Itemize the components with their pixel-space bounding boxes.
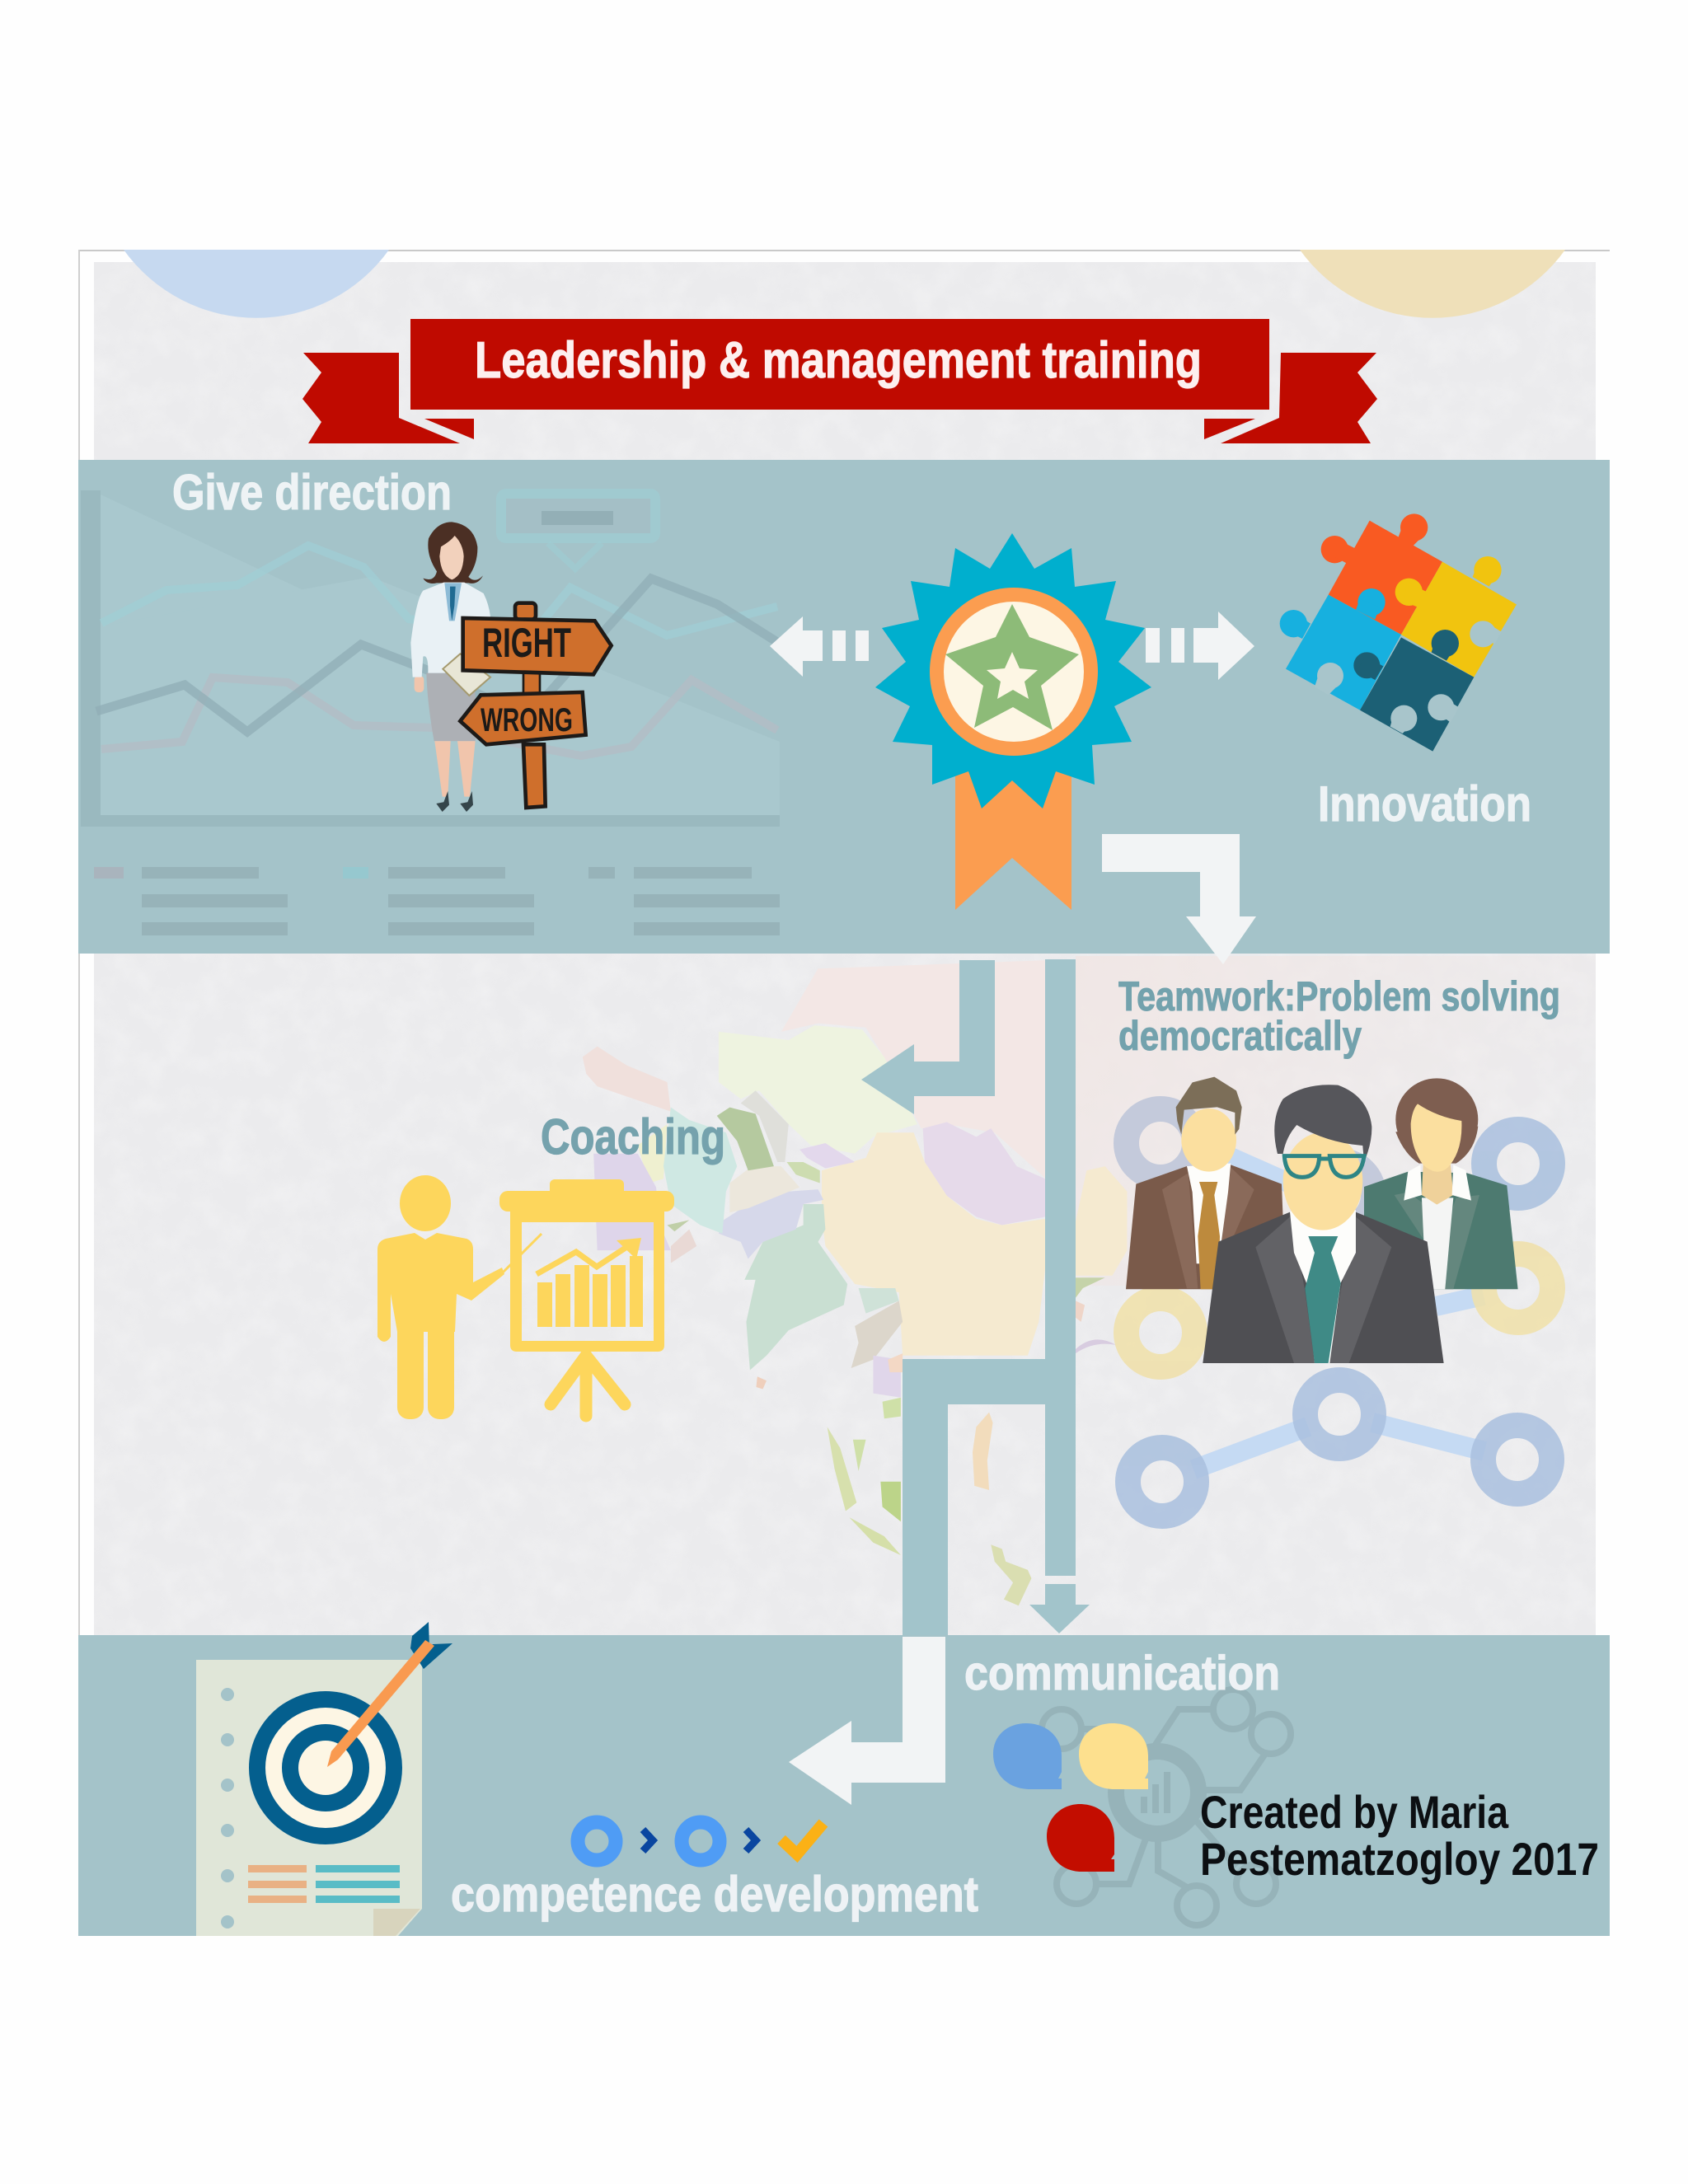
arrow in target <box>327 1622 452 1767</box>
icon: target on paper <box>196 1622 452 1936</box>
arrow: white elbow to competence <box>789 1637 945 1805</box>
heading: teamwork <box>1118 973 1560 1059</box>
banner left tail <box>302 353 460 443</box>
target <box>249 1691 402 1844</box>
title banner <box>302 319 1377 443</box>
person: back right woman <box>1364 1078 1518 1289</box>
paper background <box>78 250 1610 1638</box>
heading: innovation: Innovation <box>1318 776 1531 832</box>
arrow: dashed left <box>770 616 869 677</box>
icon: progress steps <box>578 1822 823 1860</box>
heading: give direction: Give direction <box>172 465 452 520</box>
icon: presenter at board <box>377 1175 674 1419</box>
banner right fold <box>1204 419 1255 439</box>
sunburst <box>875 533 1151 808</box>
icon: rosette award <box>875 533 1151 910</box>
orange ring <box>930 588 1098 756</box>
presentation board <box>499 1179 674 1416</box>
decorative circle: blue <box>124 250 389 318</box>
green star <box>945 604 1079 730</box>
ribbon <box>955 758 1071 910</box>
list bars <box>248 1865 400 1903</box>
panel: top teal band <box>78 460 1610 954</box>
person: front man <box>1203 1085 1444 1363</box>
heading: competence development: competence development <box>451 1867 978 1922</box>
decorative circle: yellow <box>1300 250 1565 318</box>
arrow: white elbow to teamwork <box>1102 834 1256 964</box>
icon: puzzle <box>1280 513 1517 752</box>
puzzle holes <box>1315 621 1502 733</box>
faint legend <box>94 867 780 935</box>
faint network diagram <box>1042 1690 1291 1925</box>
arrow: teal elbow to coaching <box>861 960 995 1114</box>
faint line chart <box>81 490 780 827</box>
banner left fold <box>424 419 474 439</box>
banner main rectangle <box>410 319 1269 410</box>
icon: team of three people <box>1126 1077 1518 1363</box>
signpost: WRONG <box>481 702 573 738</box>
heading: coaching: Coaching <box>541 1109 725 1165</box>
puzzle piece: blue <box>1280 588 1401 710</box>
credit text: Pestematzogloy 2017 <box>1200 1833 1599 1885</box>
paper sheet <box>196 1660 422 1936</box>
credit text: Created by Maria <box>1200 1786 1509 1838</box>
title: Leadership & management training <box>475 332 1202 389</box>
arrow: dashed right <box>1146 612 1254 680</box>
signpost: RIGHT <box>482 620 571 666</box>
puzzle piece: dark <box>1353 630 1474 752</box>
heading: communication: communication <box>964 1647 1280 1700</box>
person: back left man <box>1126 1077 1286 1289</box>
binder holes <box>221 1688 234 1929</box>
faint network circles <box>1126 1109 1553 1516</box>
heading: teamwork: Teamwork:Problem solving <box>1118 973 1560 1019</box>
puzzle piece: orange <box>1321 513 1442 635</box>
banner right tail <box>1221 353 1377 443</box>
inner star <box>987 652 1038 699</box>
signpost <box>460 603 612 808</box>
cream disc <box>944 602 1084 742</box>
page fold <box>373 1909 420 1936</box>
icon: speech bubbles <box>993 1723 1148 1872</box>
puzzle piece: yellow <box>1395 556 1517 677</box>
presenter <box>377 1175 542 1419</box>
panel: bottom teal band <box>78 1635 1610 1936</box>
faint world map <box>583 960 1127 1605</box>
woman <box>410 522 490 812</box>
icon: woman with signpost <box>410 522 612 812</box>
heading: teamwork: democratically <box>1118 1013 1362 1059</box>
credit text <box>1200 1786 1599 1885</box>
arrow: teal main branch <box>903 959 1090 1635</box>
